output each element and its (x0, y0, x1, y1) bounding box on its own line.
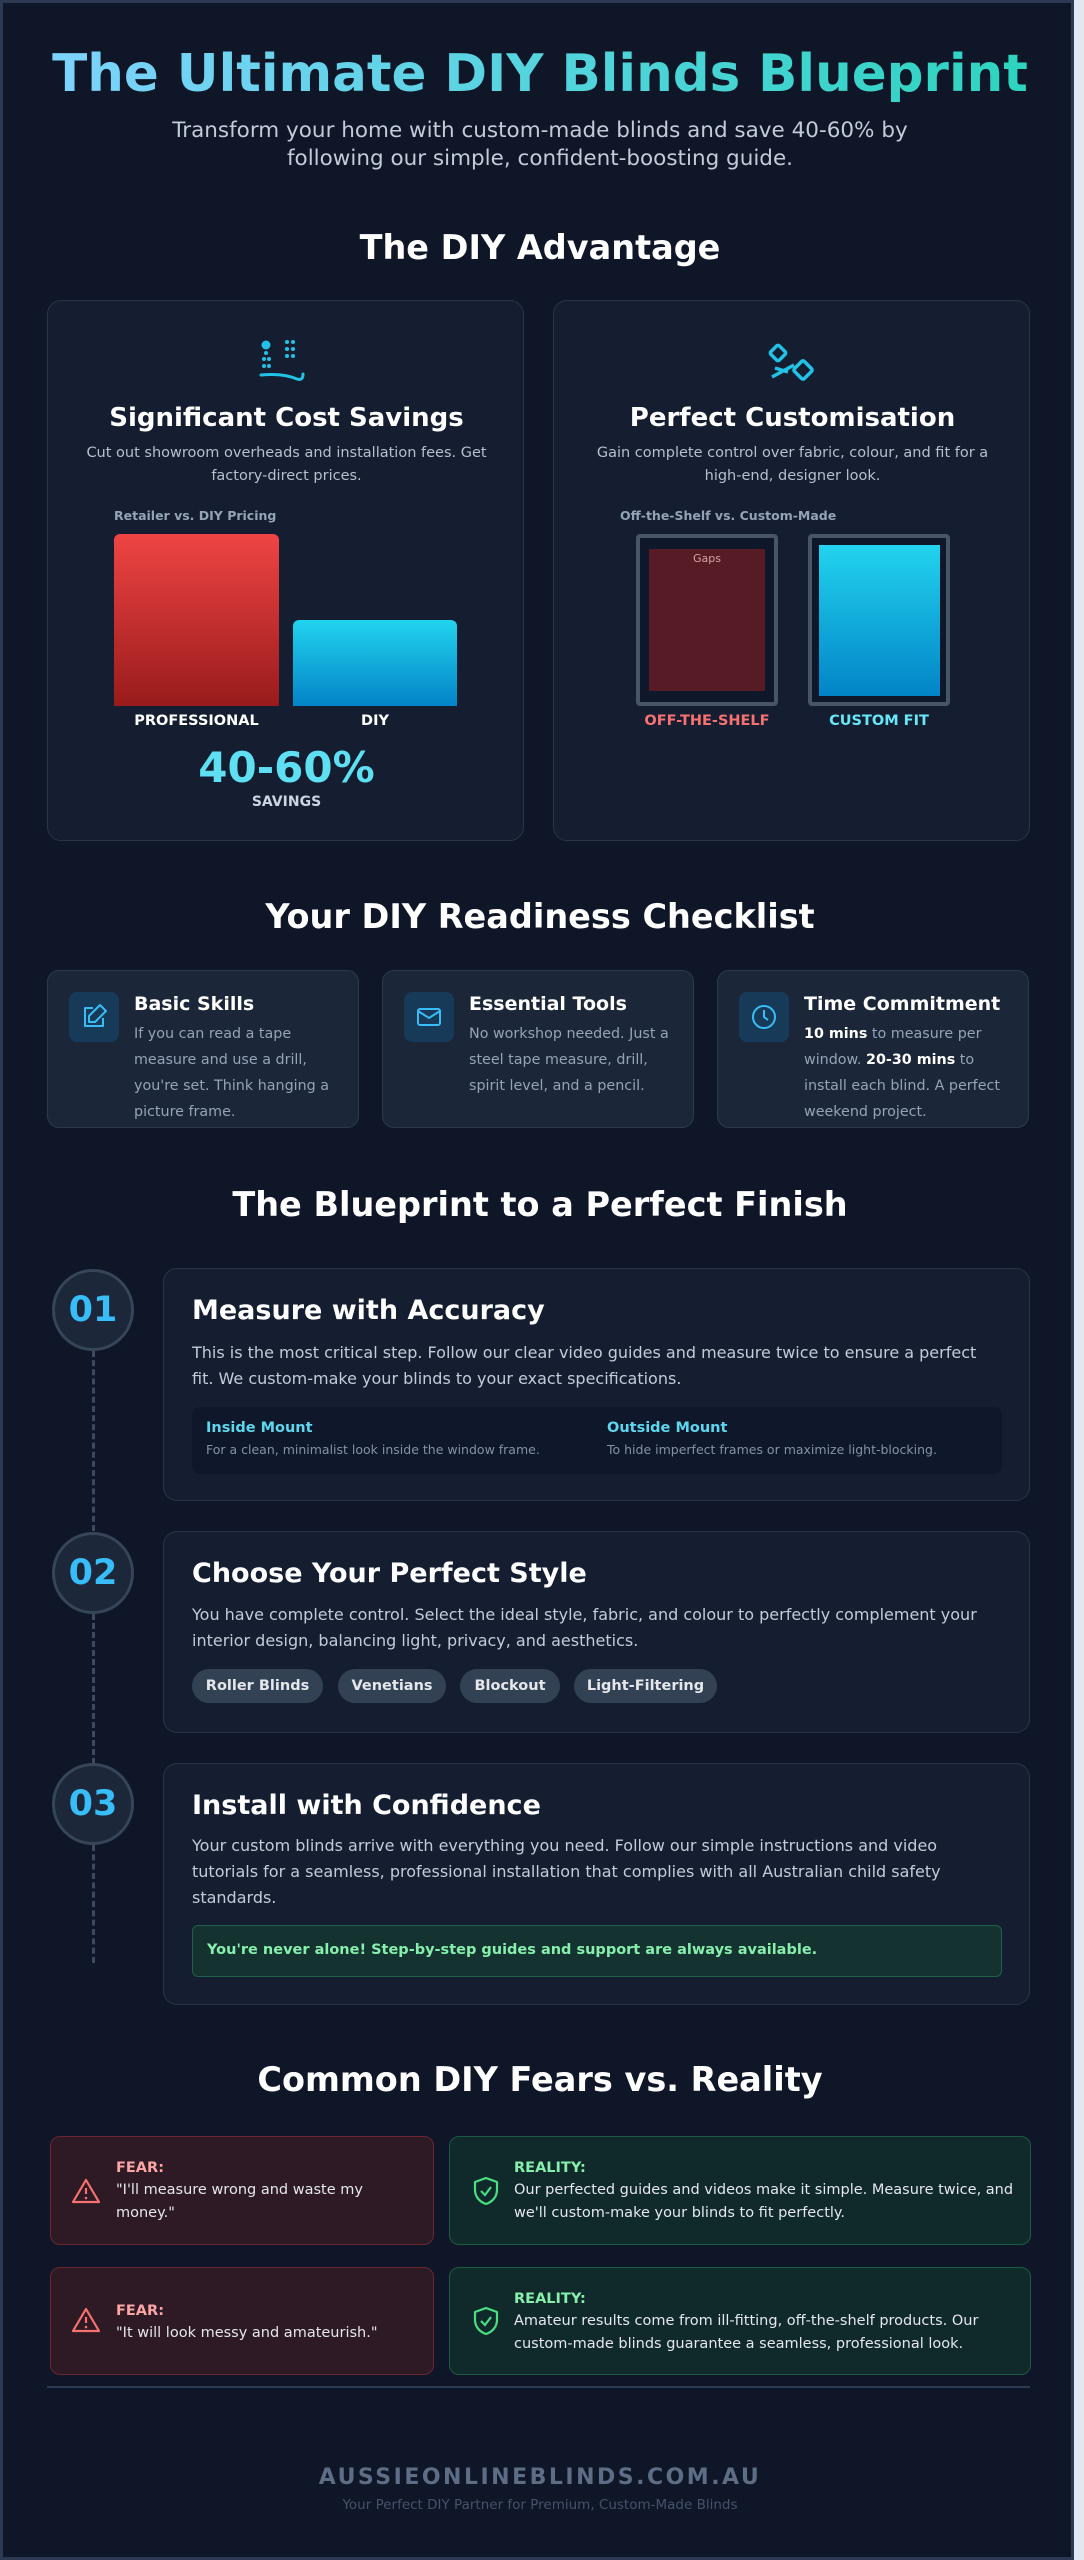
icon: warning (72, 2308, 100, 2332)
subtitle: Transform your home with custom-made blinds and save 40-60% by following our simple, confident-boosting guide. (172, 118, 908, 171)
reality 1: Our perfected guides and videos make it simple. Measure twice, and we'll custom-make your blinds to fit perfectly. (514, 2182, 1013, 2221)
fear 2: "It will look messy and amateurish." (116, 2325, 378, 2341)
card: essential tools: Essential Tools (469, 993, 627, 1015)
icon: warning (72, 2178, 100, 2204)
card: essential tools: No workshop needed. Just a steel tape measure, drill, spirit level, and a pencil. (469, 1026, 669, 1094)
style pills: Light-Filtering (587, 1678, 704, 1694)
mount options: Inside Mount (206, 1420, 313, 1436)
icon: clock (739, 992, 789, 1042)
fear 2 (50, 2267, 434, 2375)
support callout (192, 1925, 1002, 1977)
step 2 card: Choose Your Perfect Style (192, 1558, 587, 1589)
fear 1: "I'll measure wrong and waste my money." (116, 2182, 363, 2221)
fear 1: FEAR: (116, 2160, 164, 2176)
step 1 card: Measure with Accuracy (192, 1295, 545, 1326)
mount options: For a clean, minimalist look inside the window frame. (206, 1442, 540, 1457)
description: Cut out showroom overheads and installation fees. Get factory-direct prices. (86, 445, 487, 484)
heading: checklist: Your DIY Readiness Checklist (265, 897, 815, 936)
mount options: Outside Mount (607, 1420, 727, 1436)
reality 1 (449, 2136, 1031, 2245)
timeline lines (92, 1351, 95, 1531)
icon: savings (260, 340, 304, 381)
step 2 number (52, 1532, 134, 1614)
comparison chart: CUSTOM FIT (829, 713, 929, 729)
footer: Your Perfect DIY Partner for Premium, Custom-Made Blinds (342, 2497, 738, 2513)
bar chart (114, 508, 457, 729)
icon: mail (404, 992, 454, 1042)
mount options (192, 1407, 1002, 1474)
step 1 card: This is the most critical step. Follow our clear video guides and measure twice to ensure a perfect fit. We custom-make your blinds to your exact specifications. (192, 1343, 976, 1388)
reality 2: Amateur results come from ill-fitting, off-the-shelf products. Our custom-made blinds guarantee a seamless, professional look. (514, 2313, 978, 2352)
step 3 number: 03 (69, 1784, 117, 1824)
panel: cost savings: PROFESSIONAL (134, 713, 259, 729)
comparison chart: OFF-THE-SHELF (644, 713, 770, 729)
bar chart: Retailer vs. DIY Pricing (114, 508, 276, 523)
bar: diy (293, 620, 457, 706)
reality 2 (449, 2267, 1031, 2375)
step 3 card: Install with Confidence (192, 1790, 541, 1821)
frame: off-the-shelf (636, 534, 778, 706)
card: basic skills (47, 970, 359, 1128)
step 3 card (163, 1763, 1030, 2005)
heading: Significant Cost Savings (109, 403, 464, 433)
style pills (192, 1669, 717, 1703)
fear 2: FEAR: (116, 2303, 164, 2319)
stat: savings: SAVINGS (252, 794, 321, 810)
icon: pencil (69, 992, 119, 1042)
reality 1: REALITY: (514, 2160, 586, 2176)
panel: cost savings: DIY (361, 713, 389, 729)
card: basic skills: If you can read a tape measure and use a drill, you're set. Think hanging a picture frame. (134, 1026, 329, 1120)
footer (318, 2465, 761, 2513)
step 2 card: You have complete control. Select the ideal style, fabric, and colour to perfectly complement your interior design, balancing light, privacy, and aesthetics. (192, 1605, 977, 1650)
icon: shield (474, 2306, 498, 2336)
heading: blueprint: The Blueprint to a Perfect Finish (232, 1185, 848, 1224)
description: Gain complete control over fabric, colour, and fit for a high-end, designer look. (597, 445, 988, 484)
step 2 card (163, 1531, 1030, 1733)
support callout: You're never alone! Step-by-step guides and support are always available. (207, 1942, 817, 1958)
title: The Ultimate DIY Blinds Blueprint (52, 44, 1028, 104)
heading: Perfect Customisation (630, 403, 955, 433)
card: time commitment (717, 970, 1029, 1128)
step 1 number (52, 1269, 134, 1351)
step 1 card (163, 1268, 1030, 1501)
step 2 number: 02 (69, 1553, 117, 1593)
footer: AUSSIEONLINEBLINDS.COM.AU (319, 2465, 761, 2490)
card: essential tools (382, 970, 694, 1128)
step 3 number (52, 1763, 134, 1845)
panel: customisation (553, 300, 1030, 841)
style pills: Blockout (474, 1678, 546, 1694)
bar: professional (114, 534, 279, 706)
style pills: Roller Blinds (206, 1678, 309, 1694)
card: time commitment: Time Commitment (804, 993, 1000, 1015)
stat: savings: 40-60% (198, 743, 375, 792)
comparison chart: Off-the-Shelf vs. Custom-Made (620, 508, 836, 523)
style pills: Venetians (351, 1678, 433, 1694)
reality 2: REALITY: (514, 2291, 586, 2307)
card: basic skills: Basic Skills (134, 993, 254, 1015)
panel: cost savings (47, 300, 524, 841)
icon: shield (474, 2176, 498, 2206)
heading: The DIY Advantage: The DIY Advantage (360, 228, 720, 267)
comparison chart (620, 508, 950, 729)
fear 1 (50, 2136, 434, 2245)
card: time commitment: 10 mins to measure per window. 20-30 mins to install each blind. A perfect weekend project. (804, 1026, 1000, 1120)
step 3 card: Your custom blinds arrive with everything you need. Follow our simple instructions and video tutorials for a seamless, professional installation that complies with all Australian child safety standards. (192, 1836, 941, 1907)
step 1 number: 01 (69, 1290, 117, 1330)
frame: custom (808, 534, 950, 706)
frame: off-the-shelf: Gaps (693, 552, 721, 565)
heading: fears vs reality: Common DIY Fears vs. Reality (257, 2060, 823, 2099)
mount options: To hide imperfect frames or maximize light-blocking. (607, 1442, 937, 1457)
icon: tools (768, 344, 814, 381)
